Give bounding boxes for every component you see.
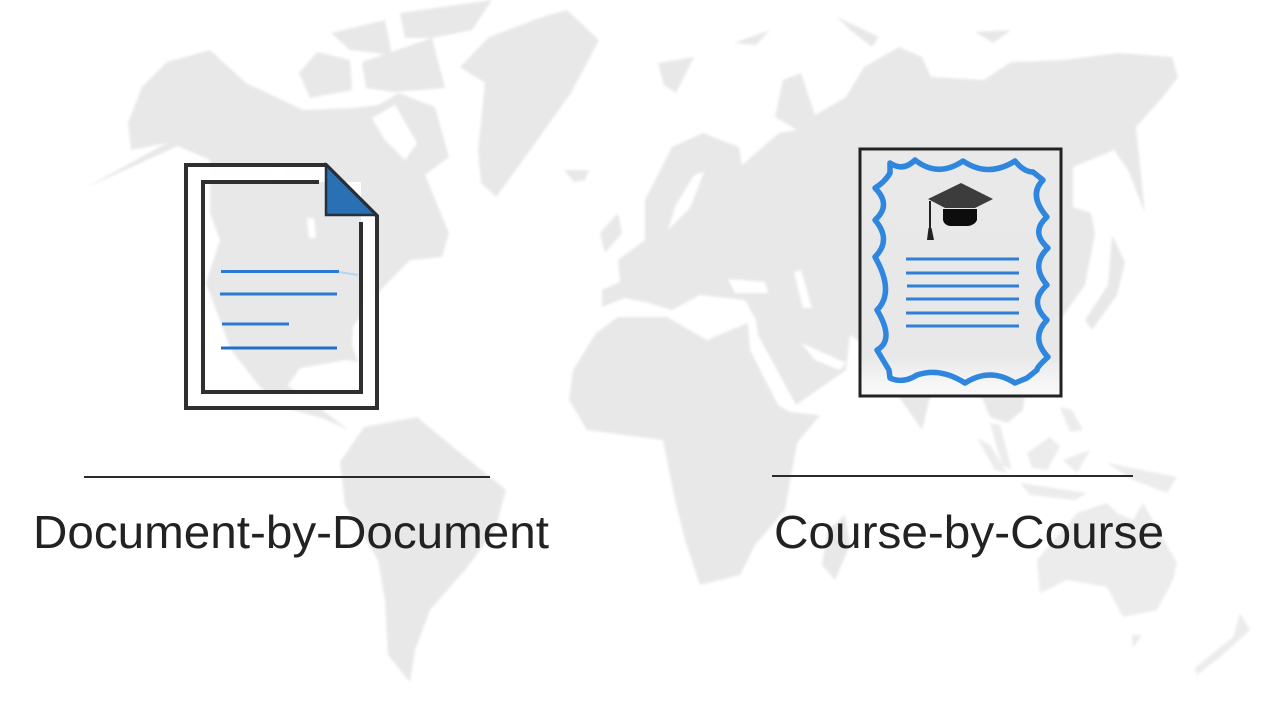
- icon: document: [186, 165, 377, 408]
- south-east asia and oceania: [977, 407, 1250, 675]
- icon: diploma certificate: [860, 149, 1061, 396]
- right divider: [772, 475, 1133, 477]
- wavy blue border: [875, 160, 1048, 383]
- icon: folded corner: [326, 165, 376, 215]
- document white margin: [186, 165, 377, 408]
- label: Document-by-Document: Document-by-Document: [33, 506, 549, 558]
- certificate text lines: [906, 259, 1019, 326]
- left divider: [84, 476, 490, 478]
- label: Course-by-Course: Course-by-Course: [774, 506, 1164, 558]
- icon: graduation cap: [927, 183, 993, 240]
- inland seas: [272, 105, 846, 370]
- document text lines: [220, 272, 358, 348]
